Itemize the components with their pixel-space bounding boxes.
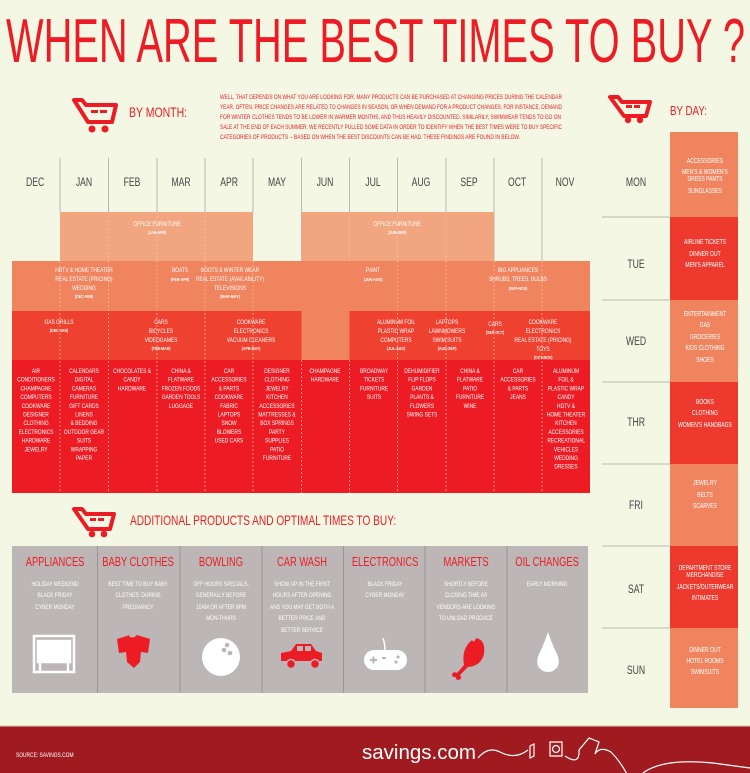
intro text	[220, 94, 562, 141]
panel: by day: SHOES	[696, 356, 714, 364]
column: car wash: CAR WASH	[277, 556, 327, 569]
band: single-month products: & PARTS	[508, 386, 528, 393]
month header: MAR	[171, 177, 191, 189]
band: row 3: (AUG-SEP)	[438, 345, 457, 351]
intro text: CATEGORIES OF PRODUCTS -- BASED ON WHEN THE BEST DISCOUNTS CAN BE HAD. THESE FINDINGS ARE FOUND IN BELOW.	[220, 134, 520, 141]
intro text: YEAR. OFTEN, PRICE CHANGES ARE RELATED TO CHANGES IN SEASON, OR WHEN DEMAND FOR A PRODUCT CHANGES. FOR INSTANCE, DEMAND	[220, 104, 562, 111]
band: row 3: CARS	[154, 319, 168, 326]
band: single-month products: DESIGNER	[264, 368, 290, 375]
band: single-month products: JEANS	[510, 395, 526, 401]
band: single-month products: HOME THEATER	[547, 412, 585, 419]
band: single-month products: & BEDDING	[71, 421, 98, 427]
panel: by day: SUNGLASSES	[688, 187, 722, 195]
band: single-month products: GARDEN	[412, 386, 432, 393]
band: single-month products: CHINA &	[171, 368, 191, 375]
column: car wash: BETTER SERVICE	[281, 627, 323, 634]
column: bowling: OFF HOURS SPECIALS,	[193, 581, 249, 588]
month header: AUG	[412, 177, 430, 189]
band: row 3: (FEB-MAR)	[152, 345, 171, 351]
band: single-month products: SNOW	[221, 421, 237, 427]
month header: NOV	[556, 177, 574, 189]
band: single-month products	[17, 368, 586, 471]
band: single-month products: SWING SETS	[407, 412, 437, 419]
footer: SOURCE: SAVINGS.COM	[16, 752, 74, 759]
heading: by month: BY MONTH:	[129, 105, 187, 120]
band: row 2: REAL ESTATE (AVAILABILITY)	[196, 276, 264, 283]
band: single-month products: GARDEN TOOLS	[162, 395, 200, 401]
panel: by day: HOTEL ROOMS	[687, 657, 723, 665]
band: single-month products: TICKETS	[364, 377, 384, 384]
band: single-month products: AIR	[32, 368, 40, 375]
band: row 3: ELECTRONICS	[234, 328, 268, 335]
panel: by day: KIDS CLOTHING	[686, 344, 725, 352]
band: row 3: (JUL-AUG)	[387, 345, 406, 351]
band: single-month products: PLANTS &	[410, 395, 434, 401]
band: single-month products: FROZEN FOODS	[162, 386, 200, 393]
band: single-month products: LAPTOPS	[218, 412, 240, 419]
icon: cart by month	[74, 100, 116, 132]
band: single-month products: CANDY	[557, 395, 575, 401]
band: row 2: SHRUBS, TREES, BULBS	[489, 276, 547, 283]
band: single-month products: WRAPPING	[71, 447, 98, 454]
band: single-month products: CALENDARS	[69, 368, 99, 375]
band: single-month products: KITCHEN	[555, 421, 577, 427]
band: row 2: BOATS	[172, 267, 188, 274]
column: baby clothes: CLOTHES: DURING	[116, 592, 161, 599]
band: single-month products: DIGITAL	[75, 377, 94, 384]
band: single-month products: FURNITURE	[360, 386, 388, 393]
band: office furniture	[133, 221, 421, 235]
column: appliances: BLACK FRIDAY	[38, 592, 73, 599]
panel: by day: SWIMSUITS	[691, 668, 719, 676]
panel: by day: BELTS	[697, 491, 713, 499]
band: single-month products: MATTRESSES &	[258, 412, 296, 419]
column: appliances: APPLIANCES	[26, 556, 85, 569]
band: single-month products: FOIL &	[558, 377, 574, 384]
band: single-month products: COOKWARE	[22, 403, 50, 410]
panel: by day: INTIMATES	[692, 594, 718, 602]
band: single-month products: JEWELRY	[266, 386, 289, 393]
month header: MAY	[268, 177, 286, 189]
panel: by day: WED	[626, 336, 647, 348]
column: electronics	[352, 556, 419, 670]
band: single-month products: ACCESSORIES	[548, 429, 584, 436]
band: single-month products: DESIGNER	[23, 412, 49, 419]
band: single-month products: PATIO	[270, 447, 284, 454]
column: baby clothes	[102, 556, 174, 668]
column: markets: MARKETS	[443, 556, 489, 569]
icon: cart by day	[610, 97, 650, 123]
panel: by day: DEPARTMENT STORE	[679, 564, 731, 572]
panel: by day: MERCHANDISE	[686, 571, 724, 579]
band: single-month products: RECREATIONAL	[547, 438, 586, 445]
band: single-month products: FLATWARE	[457, 377, 483, 384]
column: car wash: BETTER PRICE AND	[279, 615, 325, 622]
band: row 3: PLASTIC WRAP	[378, 328, 414, 335]
column: oil changes	[515, 556, 579, 672]
band: single-month products: FURNITURE	[70, 395, 98, 401]
band: single-month products: FLIP FLOPS	[408, 377, 436, 384]
panel: by day: BOOKS	[696, 398, 714, 406]
panel: by day: DINNER OUT	[689, 646, 721, 654]
band: row 2: PAINT	[366, 267, 380, 274]
column: bowling	[193, 556, 249, 676]
panel: by day: THR	[627, 417, 645, 429]
band: row 3: (SEP-OCT)	[486, 329, 505, 335]
column: bowling: MON-THURS	[206, 615, 236, 622]
panel: by day: GAS	[700, 321, 710, 329]
band: single-month products: FABRIC	[220, 403, 239, 410]
column: oil changes: OIL CHANGES	[515, 556, 579, 569]
column: baby clothes: BABY CLOTHES	[102, 556, 174, 569]
band: row 2: (JUN-AUG)	[364, 276, 383, 282]
month header	[26, 158, 574, 261]
band: row 3: ALUMINUM FOIL	[377, 319, 416, 326]
band: single-month products: FLATWARE	[168, 377, 194, 384]
column: appliances	[26, 556, 85, 672]
heading: by day: BY DAY:	[670, 105, 707, 118]
band: single-month products: CONDITIONERS	[17, 377, 55, 384]
band: single-month products: ACCESSORIES	[211, 377, 247, 384]
column: markets	[437, 556, 496, 680]
column: electronics: ELECTRONICS	[352, 556, 419, 569]
month header: SEP	[460, 177, 478, 189]
band: single-month products: COMPUTERS	[20, 395, 52, 401]
band: single-month products: VEHICLES	[554, 447, 578, 454]
intro text: FOR WINTER CLOTHES TENDS TO BE LOWER IN WARMER MONTHS, AND THUS HEAVILY DISCOUNTED. SIMILARILY, SWIMWEAR TENDS TO GO ON	[220, 114, 561, 121]
band: row 2: (FEB-APR)	[171, 276, 190, 282]
band: single-month products: DRESSES	[554, 464, 578, 471]
column: oil changes: EARLY MORNING	[527, 581, 568, 588]
column: car wash	[270, 556, 334, 668]
panel: by day: ENTERTAINMENT	[684, 310, 726, 318]
band: single-month products: BLOWERS	[217, 429, 241, 436]
band: single-month products: ACCESSORIES	[500, 377, 536, 384]
logo: savings.com: savings.com	[362, 742, 476, 764]
column: car wash: AND YOU MAY GET BOTH A	[270, 604, 334, 611]
band: single-month products: & PARTS	[219, 386, 239, 393]
column: baby clothes: PREGNANCY	[123, 604, 154, 611]
panel: by day: SCARVES	[693, 502, 717, 510]
band: single-month products: ELECTRONICS	[19, 429, 53, 436]
band: single-month products: PARTY	[269, 429, 285, 436]
band: single-month products: COOKWARE	[215, 395, 243, 401]
band: single-month products: PAPER	[76, 455, 92, 462]
panel: by day: GROCERIES	[690, 333, 720, 341]
band: single-month products: CAMERAS	[72, 386, 96, 393]
band: row 3: COOKWARE	[529, 319, 557, 326]
panel: by day: MEN'S & WOMEN'S	[682, 168, 728, 176]
month header: JUN	[317, 177, 333, 189]
intro text: WELL, THAT DEPENDS ON WHAT YOU ARE LOOKING FOR. MANY PRODUCTS CAN BE PURCHASED AT CHANGING PRICES DURING THE CALENDAR	[220, 94, 562, 101]
band: row 3: ELECTRONICS	[526, 328, 560, 335]
column: car wash: HOURS AFTER OPENING	[273, 592, 332, 599]
band: office furniture: (JUN-SEP)	[388, 229, 407, 235]
band: single-month products: WEDDING	[554, 455, 578, 462]
band: single-month products: ACCESSORIES	[259, 403, 295, 410]
column: appliances: CYBER MONDAY	[35, 604, 75, 611]
band: row 2: (SEP-NOV)	[509, 285, 528, 291]
band: row 3: TOYS	[536, 346, 550, 353]
band: single-month products: CLOTHING	[23, 421, 49, 427]
band: single-month products: CLOTHING	[264, 377, 290, 384]
band: single-month products: BROADWAY	[360, 368, 388, 375]
band: single-month products: SUPPLIES	[265, 438, 289, 445]
band: row 3	[44, 319, 572, 360]
band: single-month products: BOX SPRINGS	[260, 421, 294, 427]
column: markets: VENDORS ARE LOOKING	[437, 604, 496, 611]
column: baby clothes: BEST TIME TO BUY BABY	[108, 581, 168, 588]
band: single-month products: PLASTIC WRAP	[548, 386, 584, 393]
band: row 3: VIDEOGAMES	[145, 337, 177, 344]
band: row 3: COOKWARE	[237, 319, 265, 326]
band: office furniture: OFFICE FURNITURE	[373, 221, 421, 228]
band: row 2	[55, 267, 547, 299]
column: bowling: GENERALLY BEFORE	[196, 592, 246, 599]
band: row 2: (DEC-FEB)	[75, 293, 94, 299]
band: row 2: TELEVISIONS	[214, 285, 246, 292]
band: office furniture: (JAN-APR)	[148, 229, 167, 235]
column: appliances: HOLIDAY WEEKEND	[31, 581, 79, 588]
panel: additional products	[12, 546, 588, 693]
band: row 3: SWIM SUITS	[433, 337, 462, 344]
band: single-month products: CHAMPAGNE	[309, 368, 341, 375]
band: single-month products: GIFT CARDS	[69, 403, 99, 410]
panel: by day: DRESS PANTS	[687, 175, 723, 183]
band: row 3: LAPTOPS	[436, 319, 458, 326]
month header: JAN	[76, 177, 92, 189]
band: row 3: CARS	[488, 321, 502, 328]
band: single-month products: LINENS	[75, 412, 93, 419]
band: single-month products: CHINA &	[460, 368, 480, 375]
panel: by day: CLOTHING	[692, 409, 718, 417]
panel: by day: FRI	[629, 500, 643, 512]
band: row 3: COMPUTERS	[380, 337, 412, 344]
column: markets: CLOSING TIME AS	[445, 592, 487, 599]
band: single-month products: FLOWERS	[410, 403, 434, 410]
band: single-month products: CAR	[224, 368, 234, 375]
panel: by day: AIRLINE TICKETS	[684, 238, 726, 246]
panel: by day: SAT	[628, 584, 645, 596]
month header: APR	[220, 177, 238, 189]
month header: FEB	[124, 177, 140, 189]
panel: by day: JACKETS/OUTERWEAR	[677, 583, 734, 591]
band: single-month products: HDTV &	[557, 403, 575, 410]
band: row 2: (MAR-MAY)	[220, 293, 240, 299]
column: markets: SHORTLY BEFORE	[444, 581, 488, 588]
band: row 2: BIG APPLIANCES	[498, 267, 538, 274]
band: row 2: BOOTS & WINTER WEAR	[201, 267, 259, 274]
column: bowling: 10AM OR AFTER 9PM	[196, 604, 246, 611]
band: single-month products: WINE	[464, 403, 476, 410]
chart: monthly bands	[12, 212, 590, 493]
panel: by day: SUN	[627, 665, 645, 677]
column: car wash: SHOW UP IN THE FIRST	[274, 581, 330, 588]
band: single-month products: HARDWARE	[311, 377, 339, 384]
band: single-month products: JEWELRY	[25, 447, 48, 454]
band: single-month products: CANDY	[123, 377, 141, 384]
band: single-month products: KITCHEN	[266, 395, 288, 401]
band: row 3: LAWNMOWERS	[429, 328, 465, 335]
column: electronics: CYBER MONDAY	[365, 592, 405, 599]
panel: by day: TUE	[627, 259, 645, 271]
panel: by day: MON	[626, 177, 646, 189]
column: electronics: BLACK FRIDAY	[368, 581, 403, 588]
panel: by day: JEWELRY	[693, 479, 717, 487]
band: single-month products: DEHUMIDIFIER	[404, 368, 440, 375]
column: markets: TO UNLOAD PRODUCE	[439, 615, 493, 622]
band: row 3: BICYCLES	[149, 328, 173, 335]
band: single-month products: FURNITURE	[456, 395, 484, 401]
band: office furniture: OFFICE FURNITURE	[133, 221, 181, 228]
band: single-month products: PATIO	[463, 386, 477, 393]
band: row 3: (OCT-NOV)	[534, 354, 553, 360]
month header: OCT	[508, 177, 527, 189]
heading: additional products: ADDITIONAL PRODUCTS AND OPTIMAL TIMES TO BUY:	[130, 513, 396, 528]
band: single-month products: OUTDOOR GEAR	[64, 429, 104, 436]
panel: by day	[602, 132, 738, 708]
band: single-month products: LUGGAGE	[169, 403, 193, 410]
band: single-month products: CAR	[513, 368, 523, 375]
band: row 3: (APR-MAY)	[242, 345, 261, 351]
panel: by day: WOMEN'S HANDBAGS	[678, 421, 732, 429]
band: row 2: WEDDING	[72, 285, 96, 292]
band: single-month products: HARDWARE	[118, 386, 146, 393]
band: row 2: REAL ESTATE (PRICING)	[55, 276, 113, 283]
intro text: SALE AT THE END OF EACH SUMMER. WE RECENTLY PULLED SOME DATA IN ORDER TO IDENTIFY WHEN THE BEST TIMES WERE TO BUY SPECIFIC	[220, 124, 562, 131]
month header: DEC	[26, 177, 45, 189]
band: row 3: (DEC-JAN)	[50, 327, 69, 333]
band: single-month products: HARDWARE	[22, 438, 50, 445]
panel: by day: MEN'S APPAREL	[685, 261, 725, 269]
band: row 2: HDTV & HOME THEATER	[55, 267, 113, 274]
band: single-month products: CHAMPAGNE	[20, 386, 52, 393]
band: single-month products: ALUMINUM	[553, 368, 579, 375]
band: row 3: VACUUM CLEANERS	[227, 337, 275, 344]
band: row 3: GAS GRILLS	[44, 319, 74, 326]
band: single-month products: USED CARS	[215, 438, 243, 445]
band: single-month products: SUITS	[367, 395, 381, 401]
band: single-month products: SUITS	[77, 438, 91, 445]
band: single-month products: FURNITURE	[263, 455, 291, 462]
icon: cart additional	[74, 509, 114, 537]
column: bowling: BOWLING	[199, 556, 243, 569]
footer	[0, 726, 750, 773]
month header: JUL	[365, 177, 381, 189]
panel: by day: DINNER OUT	[689, 250, 721, 258]
band: row 3: REAL ESTATE (PRICING)	[514, 337, 572, 344]
panel: by day: ACCESSORIES	[687, 157, 723, 165]
band: single-month products: CHOCOLATES &	[113, 368, 151, 375]
